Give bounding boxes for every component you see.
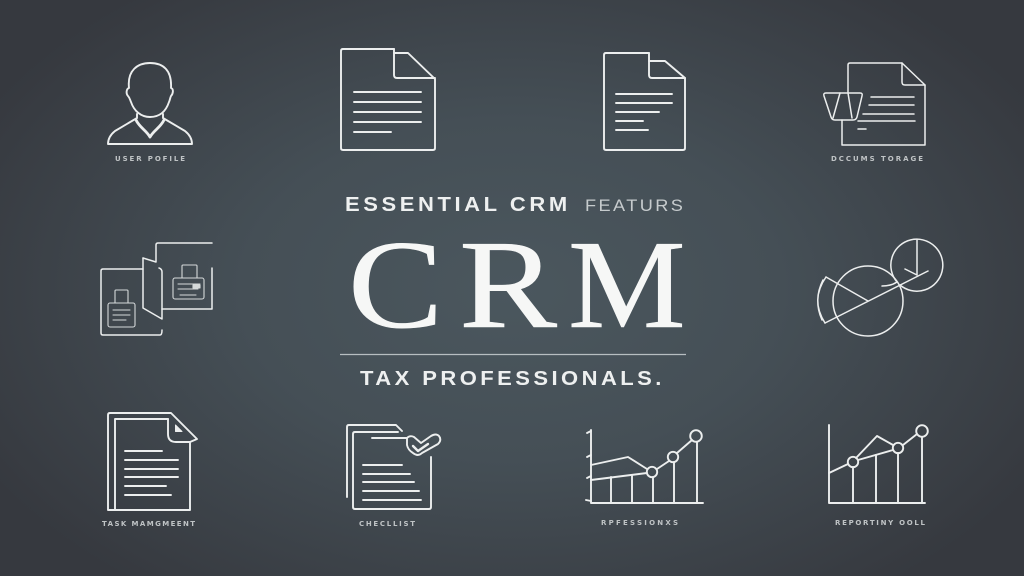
heading: CRM: M <box>568 215 686 354</box>
label: regressions: RPFESSIONXS <box>601 519 678 527</box>
label: document storage: DCCUMS TORAGE <box>831 155 923 163</box>
heading: CRM: C <box>348 215 443 355</box>
icon: locked folders <box>101 243 212 335</box>
icon: document with lines <box>341 49 435 150</box>
label: user profile: USER POFILE <box>115 155 185 163</box>
chart: regressions line chart <box>586 430 703 503</box>
subtitle: tax professionals: TAX PROFESSIONALS. <box>360 368 661 390</box>
label: checklist: CHECLLIST <box>359 520 415 528</box>
label: task management: TASK MAMGMEENT <box>102 520 195 528</box>
chart: reporting line chart <box>829 425 928 503</box>
icon: checklist document <box>347 425 440 509</box>
title: essential CRM features <box>345 194 683 216</box>
title: essential CRM features: ESSENTIAL CRM <box>345 194 567 216</box>
icon: task document <box>108 413 197 510</box>
label: reporting tool: REPORTINY OOLL <box>835 519 926 527</box>
right padlock <box>173 265 204 299</box>
icon: document storage <box>824 63 925 145</box>
title: essential CRM features: FEATURS <box>585 196 683 215</box>
heading: CRM <box>348 215 686 355</box>
heading: CRM: R <box>459 215 558 355</box>
icon: pie chart circles <box>818 239 943 336</box>
left padlock <box>108 290 135 327</box>
icon: user profile <box>108 63 192 144</box>
icon: document with short lines <box>604 53 685 150</box>
